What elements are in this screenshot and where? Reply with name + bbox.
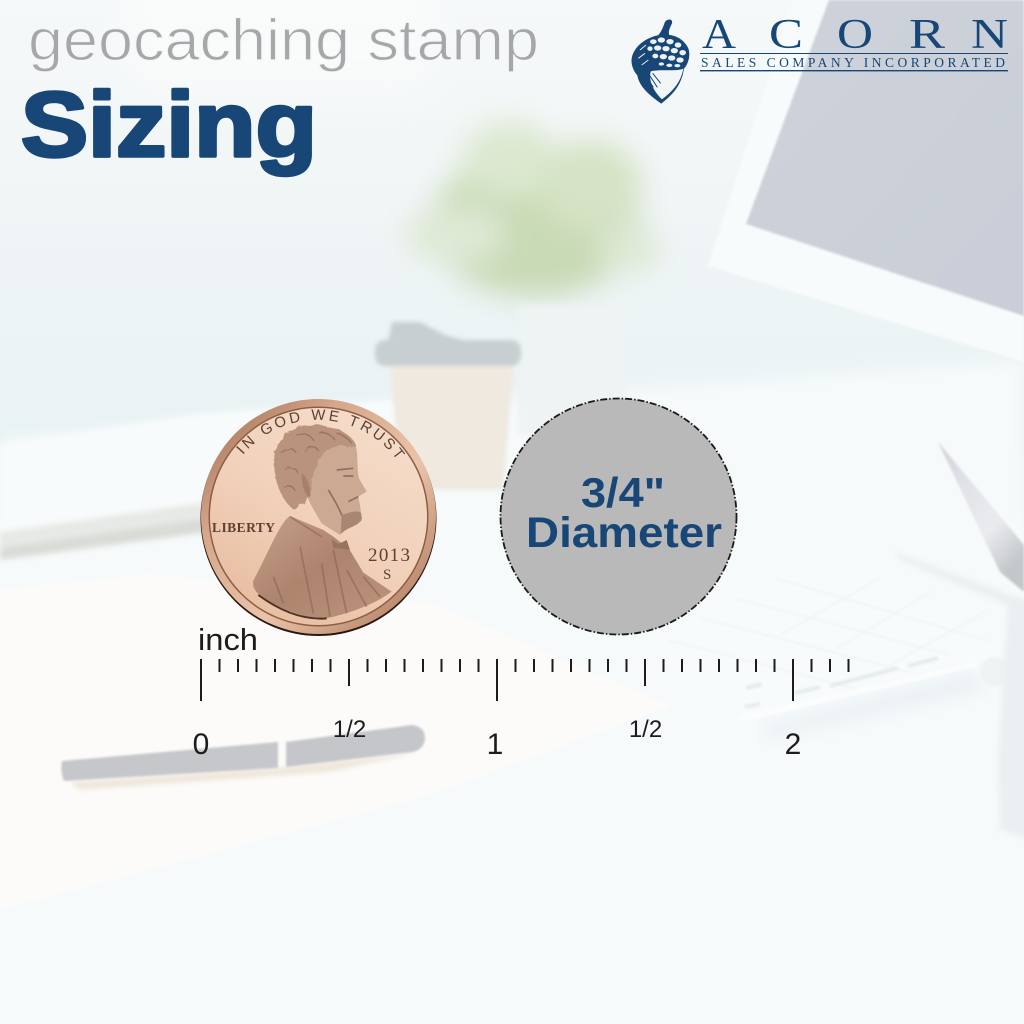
photo: computer monitor bbox=[708, 0, 1024, 362]
penny: Lincoln portrait bbox=[253, 425, 392, 619]
ruler numbers: 0 bbox=[193, 728, 209, 761]
logo wordmark: ACORN: N bbox=[971, 12, 1008, 58]
penny: mint mark: S bbox=[383, 567, 391, 583]
stamp size circle: 3/4 inch diameter: Diameter bbox=[526, 509, 722, 557]
ruler ticks bbox=[201, 659, 848, 701]
penny: LIBERTY: LIBERTY bbox=[212, 520, 275, 535]
ruler numbers: 1/2 bbox=[629, 716, 662, 743]
ruler unit label: inch bbox=[198, 622, 258, 657]
stamp size circle: 3/4 inch diameter bbox=[500, 398, 736, 634]
photo: coffee cup bbox=[375, 322, 521, 490]
ruler numbers: 1/2 bbox=[333, 716, 366, 743]
photo: green plant bbox=[405, 122, 660, 297]
logo: Acorn Sales Company Incorporated bbox=[631, 12, 1008, 104]
photo: pencils bbox=[895, 442, 1024, 612]
logo wordmark: ACORN: A bbox=[702, 12, 737, 58]
logo wordmark: ACORN: R bbox=[909, 12, 945, 58]
photo: keyboard bbox=[640, 530, 1010, 738]
penny: motto: IN GOD WE TRUST bbox=[236, 409, 406, 458]
ruler numbers: 2 bbox=[785, 728, 801, 761]
ruler bbox=[193, 622, 848, 761]
stamp size label: 3/4" bbox=[581, 469, 665, 516]
ruler numbers: 1 bbox=[487, 728, 503, 761]
icon: acorn bbox=[631, 19, 689, 104]
logo wordmark: ACORN: C bbox=[769, 12, 803, 58]
photo: plant pot bbox=[518, 305, 626, 435]
logo wordmark: ACORN: O bbox=[837, 12, 873, 58]
photo: mesh pencil cup bbox=[998, 600, 1024, 840]
photo: pen bbox=[61, 725, 425, 790]
photo: notebook stack bbox=[0, 400, 400, 560]
penny: date: 2013 bbox=[368, 545, 410, 566]
ruler numbers bbox=[193, 716, 801, 761]
subtitle: geocaching stamp: geocaching stamp bbox=[28, 8, 539, 73]
photo: paper sheet bbox=[0, 574, 671, 910]
penny coin bbox=[200, 399, 436, 636]
logo tagline: SALES COMPANY INCORPORATED bbox=[701, 55, 1005, 70]
logo wordmark: ACORN bbox=[702, 12, 1008, 58]
title: Sizing: Sizing bbox=[21, 74, 317, 176]
